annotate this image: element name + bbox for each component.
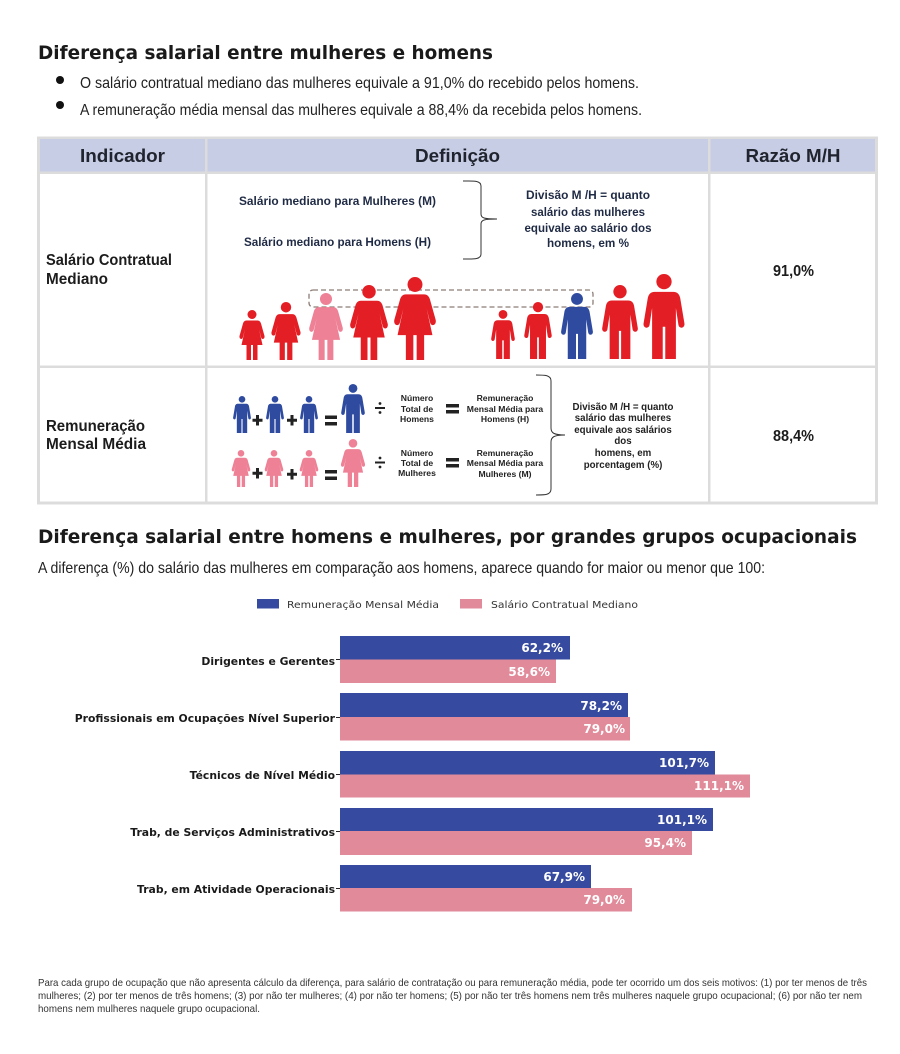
group: serviços administrativos: 101,1% — [657, 813, 707, 827]
formula text: men: Número — [401, 393, 433, 403]
formula text: men: Homens — [400, 414, 434, 424]
formula text: women: Número — [401, 448, 433, 458]
group: serviços administrativos: 95,4% — [644, 836, 686, 850]
row label: remuneração mensal média: Mensal Média — [46, 436, 146, 453]
definition text: average ratio: equivale aos salários — [574, 425, 672, 436]
group: dirigentes e gerentes: 58,6% — [508, 665, 550, 679]
footnote: homens nem mulheres naquele grupo ocupacional. — [38, 1003, 260, 1015]
group: serviços administrativos — [130, 808, 713, 855]
group: técnicos: 101,7% — [659, 756, 709, 770]
formula text: women: Mensal Média para — [467, 458, 543, 468]
ratio value: average pay: 88,4% — [773, 428, 814, 445]
footnote: mulheres; (2) por ter menos de três homens; (3) por não ter mulheres; (4) por não ter homens; (5) por não ter três homens nem três mulheres naquele grupo ocupacional; (6) por não ter nem — [38, 990, 862, 1002]
definition labels: median salary: Salário mediano para Mulheres (M) — [239, 196, 436, 208]
table header: Razão M/H — [746, 146, 840, 166]
formula text: women: Mulheres — [398, 468, 436, 478]
formula text: women: Remuneração — [477, 448, 533, 458]
formula text: men: Remuneração — [477, 393, 533, 403]
table header: Indicador — [80, 146, 165, 166]
icons: five men ordered by salary — [491, 274, 684, 359]
definition labels: median salary — [239, 196, 436, 249]
icons: men average equation — [233, 384, 365, 433]
key findings bullets: A remuneração média mensal das mulheres equivale a 88,4% da recebida pelos homens. — [80, 102, 642, 119]
key findings bullets: O salário contratual mediano das mulheres equivale a 91,0% do recebido pelos homens. — [80, 75, 639, 92]
formula text: men: Total de — [401, 404, 433, 414]
group: profissionais: Profissionais em Ocupações Nível Superior — [75, 712, 336, 725]
definition text: average ratio: Divisão M /H = quanto — [573, 402, 674, 413]
definition text: median ratio: homens, em % — [547, 238, 629, 250]
operators: divide and equals — [375, 402, 459, 468]
definition text: average ratio: porcentagem (%) — [584, 460, 662, 471]
icons: five women ordered by salary — [239, 277, 436, 360]
subtitle: A diferença (%) do salário das mulheres em comparação aos homens, aparece quando for maior ou menor que 100: — [38, 560, 765, 577]
group: técnicos — [190, 751, 750, 798]
group: atividade operacional — [137, 865, 632, 912]
group: profissionais — [75, 693, 630, 740]
row label: salário contratual mediano: Salário Contratual — [46, 252, 172, 269]
group: dirigentes e gerentes: Dirigentes e Gerentes — [201, 655, 335, 668]
legend — [257, 599, 638, 611]
table header: Definição — [415, 146, 500, 166]
group: dirigentes e gerentes — [201, 636, 570, 683]
icons: women average equation — [232, 439, 365, 487]
group: técnicos: 111,1% — [694, 779, 744, 793]
brace: average — [536, 375, 565, 495]
definition text: median ratio: equivale ao salário dos — [524, 223, 652, 235]
legend: Remuneração Mensal Média — [287, 599, 439, 611]
group: atividade operacional: 67,9% — [543, 870, 585, 884]
group: atividade operacional: Trab, em Atividade Operacionais — [137, 883, 335, 896]
formula text: women: Mulheres (M) — [478, 469, 532, 479]
formula text: women — [398, 448, 543, 479]
key findings bullets — [56, 75, 642, 119]
panel: indicator table — [38, 138, 876, 503]
dashed median highlight — [309, 290, 593, 307]
definition text: average ratio: dos — [614, 436, 632, 447]
definition text: median ratio — [524, 190, 652, 250]
legend: Salário Contratual Mediano — [491, 599, 638, 611]
group: profissionais: 79,0% — [583, 722, 625, 736]
definition labels: median salary: Salário mediano para Homens (H) — [244, 237, 431, 249]
group: dirigentes e gerentes: 62,2% — [521, 641, 563, 655]
ratio value: median salary: 91,0% — [773, 263, 814, 280]
formula text: men — [400, 393, 543, 424]
heading: occupational groups: Diferença salarial entre homens e mulheres, por grandes grupos ocupacionais — [38, 526, 857, 548]
group: técnicos: Técnicos de Nível Médio — [190, 769, 335, 782]
definition text: average ratio: homens, em — [595, 448, 652, 459]
formula text: men: Mensal Média para — [467, 404, 543, 414]
row label: salário contratual mediano: Mediano — [46, 271, 108, 288]
definition text: median ratio: Divisão M /H = quanto — [526, 190, 650, 202]
title: salary gap between women and men: Diferença salarial entre mulheres e homens — [38, 42, 493, 64]
bar chart — [75, 636, 750, 912]
formula text: women: Total de — [401, 458, 433, 468]
group: profissionais: 78,2% — [580, 699, 622, 713]
definition text: average ratio: salário das mulheres — [575, 413, 671, 424]
brace: median — [463, 181, 497, 259]
group: serviços administrativos: Trab, de Serviços Administrativos — [130, 826, 335, 839]
formula text: men: Homens (H) — [481, 414, 529, 424]
table header — [80, 146, 840, 166]
definition text: median ratio: salário das mulheres — [531, 207, 645, 219]
group: atividade operacional: 79,0% — [583, 893, 625, 907]
row label: remuneração mensal média: Remuneração — [46, 418, 145, 435]
